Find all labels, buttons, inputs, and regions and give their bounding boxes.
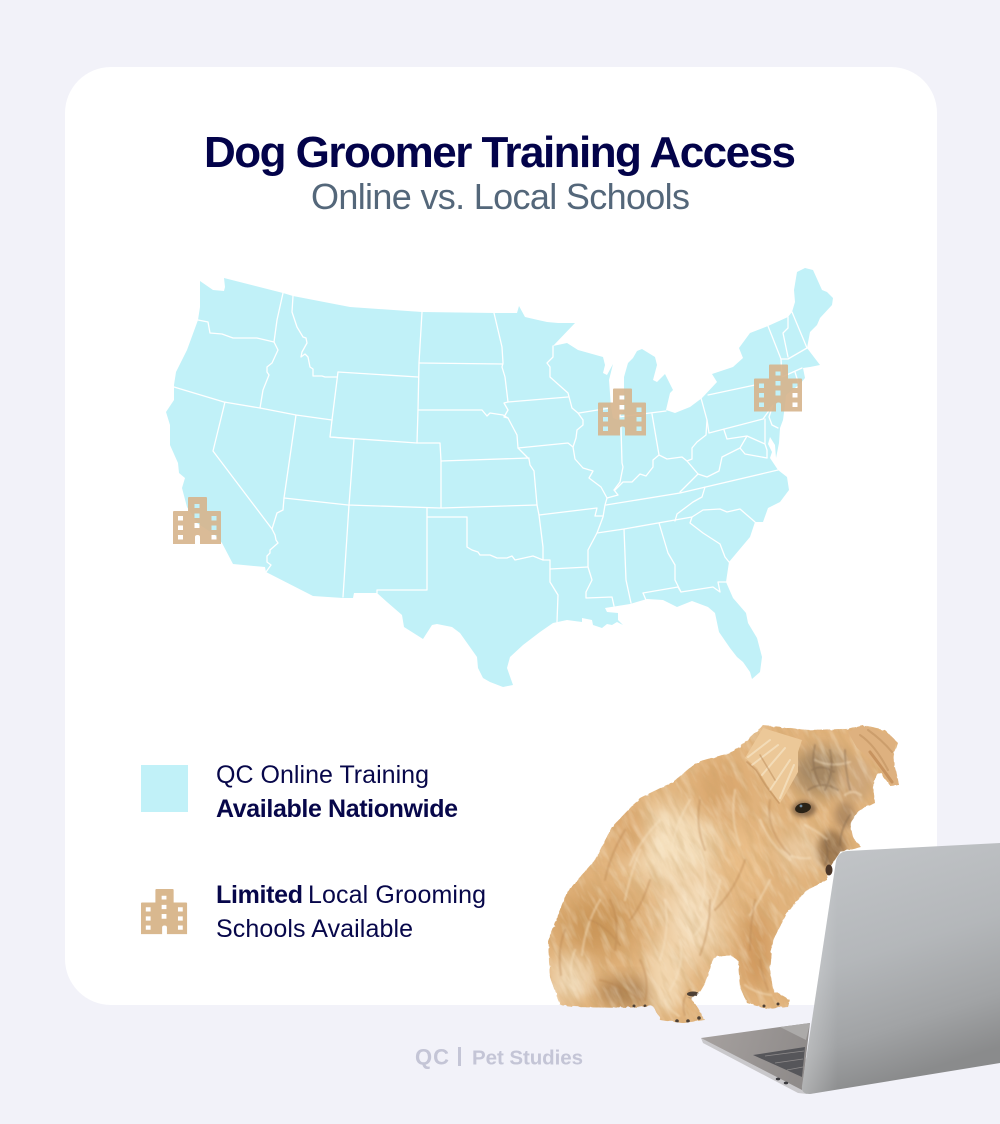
icon: school building, Los Angeles [173,497,221,544]
illustration: laptop [701,843,1000,1094]
footer logo: Pet Studies [472,1046,583,1070]
footer logo [415,1044,583,1070]
dog's paws [632,992,780,1023]
legend: online training swatch [141,765,188,812]
legend: local schools label [216,881,486,943]
subtitle: Online vs. Local Schools [311,176,690,217]
legend: online training label: QC Online Training [216,761,429,789]
title: Dog Groomer Training Access [204,128,796,177]
dog's right ear [848,725,899,786]
legend: local schools label: Schools Available [216,915,413,943]
fur strands [560,745,861,1016]
dog's left ear [745,728,802,803]
icon: school building, Chicago [598,388,646,436]
legend: online training label [216,761,458,823]
footer logo: QC [415,1044,449,1070]
illustration: dog [548,725,899,1023]
legend: local schools label: Local Grooming [308,881,486,909]
dog's nose [826,864,832,876]
icon: school building, New York [754,364,802,412]
dog's eye [792,801,816,817]
panel: white card [65,67,937,1005]
legend icon: school building [141,889,187,934]
legend: online training label: Available Nationwide [216,795,458,823]
map: contiguous United States [166,268,833,687]
legend: local schools label: Limited [216,881,303,909]
